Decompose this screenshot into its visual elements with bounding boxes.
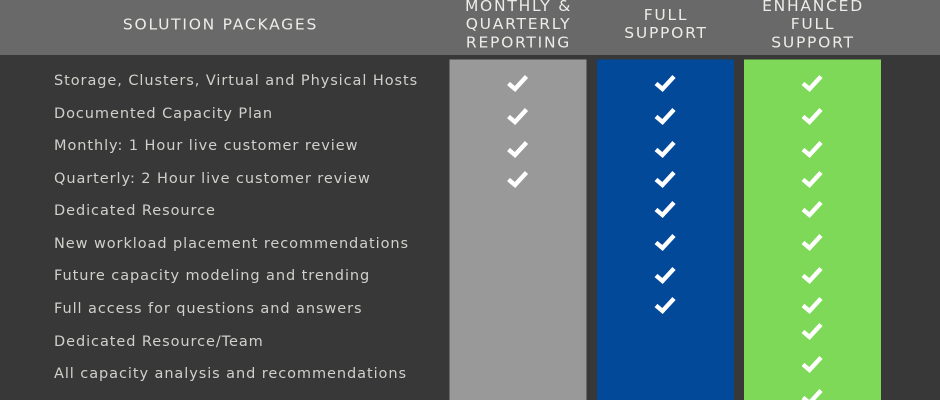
feature list: Full access for questions and answers xyxy=(54,301,362,317)
heading: full support: SUPPORT xyxy=(624,24,708,42)
heading: solution packages: SOLUTION PACKAGES xyxy=(123,16,318,34)
header bar xyxy=(0,0,940,55)
heading: enhanced full support xyxy=(762,0,864,52)
checkmarks: full support xyxy=(656,76,674,311)
feature list: All capacity analysis and recommendations xyxy=(54,366,407,382)
checkmarks: enhanced full support xyxy=(803,76,821,400)
heading: monthly and quarterly reporting: QUARTERLY xyxy=(466,15,571,33)
heading: enhanced full support: FULL xyxy=(791,15,835,33)
feature list: Future capacity modeling and trending xyxy=(54,268,370,284)
feature list: Quarterly: 2 Hour live customer review xyxy=(54,171,371,187)
heading: monthly and quarterly reporting xyxy=(465,0,572,52)
feature list: New workload placement recommendations xyxy=(54,236,409,252)
feature list: Documented Capacity Plan xyxy=(54,106,273,122)
feature list: Dedicated Resource xyxy=(54,203,216,219)
heading: full support xyxy=(624,6,708,42)
panel: full support column xyxy=(597,60,734,400)
feature list: Dedicated Resource/Team xyxy=(54,334,264,350)
panel: monthly and quarterly reporting column xyxy=(450,60,586,400)
feature list xyxy=(54,73,418,382)
heading: monthly and quarterly reporting: REPORTING xyxy=(466,34,571,52)
heading: enhanced full support: SUPPORT xyxy=(771,34,855,52)
heading: full support: FULL xyxy=(644,6,688,24)
feature list: Monthly: 1 Hour live customer review xyxy=(54,138,358,154)
checkmarks: monthly and quarterly xyxy=(508,76,526,185)
panel: enhanced full support column xyxy=(744,60,881,400)
feature list: Storage, Clusters, Virtual and Physical Hosts xyxy=(54,73,418,89)
